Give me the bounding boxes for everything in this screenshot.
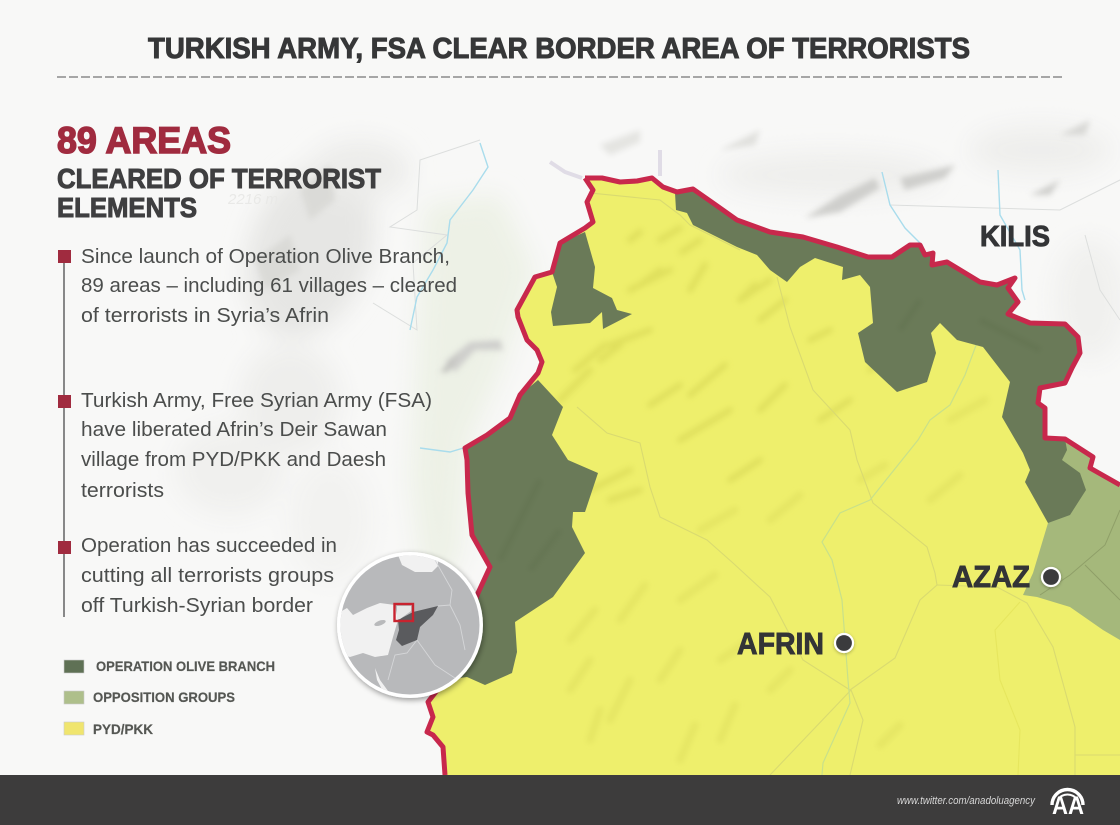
legend (64, 658, 275, 737)
bullet block 2: terrorists (81, 480, 164, 502)
footer url: www.twitter.com/anadoluagency (897, 795, 1036, 807)
subheading (57, 163, 381, 223)
border line (427, 178, 1120, 775)
region: Operation Olive Branch, west large (445, 380, 598, 685)
legend item: PYD/PKK (64, 721, 153, 737)
bullet block 3: off Turkish-Syrian border (81, 595, 313, 617)
footer bar (0, 775, 1120, 825)
label: Azaz: AZAZ (952, 559, 1030, 594)
bullet block 1: of terrorists in Syria’s Afrin (81, 305, 329, 327)
bullet block 2: have liberated Afrin’s Deir Sawan (81, 419, 387, 441)
inset: location box (394, 604, 413, 621)
subheading: ELEMENTS (57, 192, 197, 223)
inset: Mediterranean Sea (340, 603, 398, 657)
region: Operation Olive Branch, north (675, 189, 1086, 523)
inset: Afrin area (397, 606, 411, 619)
logo: Anadolu Agency: AA (1052, 792, 1084, 820)
legend item: PYD/PKK: PYD/PKK (93, 721, 153, 737)
timeline line (63, 260, 65, 617)
bullet block 2: village from PYD/PKK and Daesh (81, 449, 386, 471)
bullet block 2: Turkish Army, Free Syrian Army (FSA) (81, 390, 432, 412)
bullet block 1 (58, 246, 457, 327)
inset: Cyprus (374, 620, 386, 626)
map: controlled territories (427, 178, 1120, 775)
bullet block 1: 89 areas – including 61 villages – cleared (81, 275, 457, 297)
inset: Black Sea (398, 556, 438, 572)
bullet block 3 (58, 535, 337, 617)
label: Kilis: KILIS (980, 221, 1050, 253)
marker: Azaz (1042, 568, 1060, 586)
region: Operation Olive Branch, west small (551, 232, 632, 329)
region: opposition groups (1023, 439, 1120, 640)
inset: Syria (396, 606, 438, 646)
inset: Red Sea (375, 668, 388, 691)
subheading: CLEARED OF TERRORIST (57, 163, 381, 194)
headline: 89 areas: 89 AREAS (57, 120, 231, 161)
title: TURKISH ARMY, FSA CLEAR BORDER AREA OF TERRORISTS (148, 33, 970, 65)
inset: borders (388, 560, 465, 680)
bullet block 3: cutting all terrorists groups (81, 565, 334, 587)
marker: Afrin (835, 634, 853, 652)
label: Afrin: AFRIN (737, 626, 824, 661)
bullet block 2 (58, 390, 432, 502)
legend item: opposition groups: OPPOSITION GROUPS (93, 689, 235, 705)
bullet block 3: Operation has succeeded in (81, 535, 337, 557)
legend item: Operation Olive Branch: OPERATION OLIVE BRANCH (96, 658, 275, 674)
inset locator map (330, 550, 485, 700)
region: PYD/PKK (yellow) (427, 178, 1120, 775)
bullet block 1: Since launch of Operation Olive Branch, (81, 246, 450, 268)
faint elevation label: 2216 m (227, 191, 278, 208)
yellow area hillshade (555, 190, 1120, 775)
